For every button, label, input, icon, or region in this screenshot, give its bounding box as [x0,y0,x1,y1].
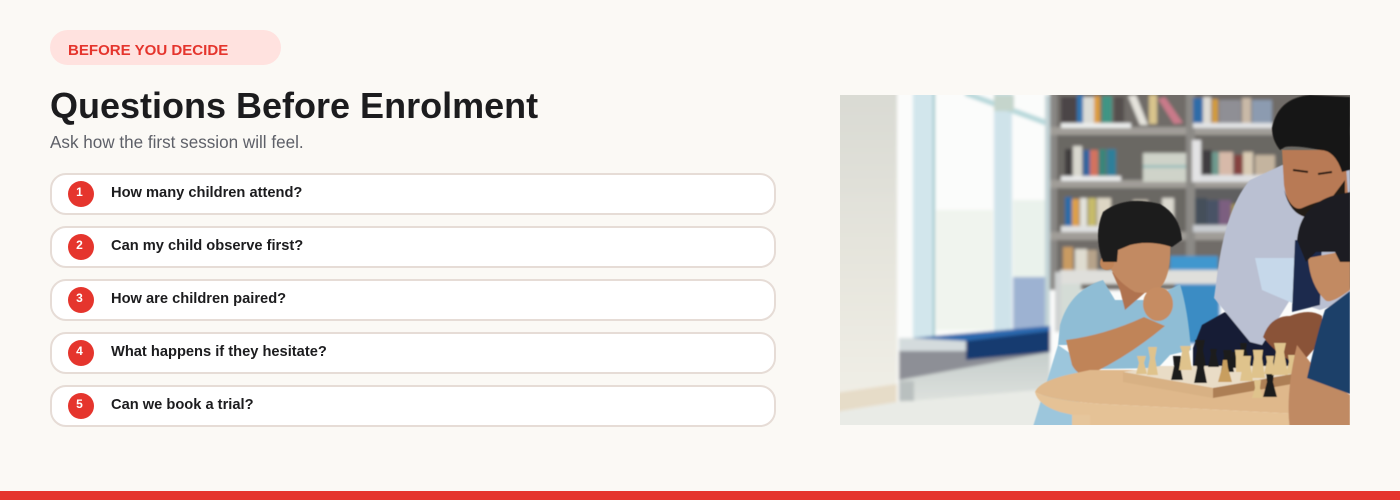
question 4 [50,332,776,374]
bench behind child [1170,256,1218,270]
light pieces [1136,343,1298,398]
number 5 [68,393,94,419]
question 2 [50,226,776,268]
number 3: 3 [76,291,83,305]
man shirt [1214,160,1350,345]
footer bar [0,491,1400,500]
books shelf 2 [1065,149,1072,177]
black pieces [1171,340,1277,397]
number 2: 2 [76,238,83,252]
question 3 text: How are children paired? [111,290,286,306]
boy two [1289,192,1350,430]
number 5: 5 [76,397,83,411]
number 1 [68,181,94,207]
badge label: BEFORE YOU DECIDE [68,42,228,58]
man trousers [1193,312,1310,375]
books shelf 1 [1061,97,1077,123]
question 5 text: Can we book a trial? [111,396,254,412]
number 4 [68,340,94,366]
people, table and chess [1032,95,1350,430]
question 5 [50,385,776,427]
boy shirt lower [1032,345,1080,430]
badge: before you decide [50,30,281,65]
subtitle: Ask how the first session will feel. [50,133,304,152]
boy one [1058,201,1191,375]
title: Questions Before Enrolment [50,85,538,126]
question 1 text: How many children attend? [111,184,302,200]
question 1 [50,173,776,215]
number 1: 1 [76,185,83,199]
background room [835,90,1355,430]
tie [1292,240,1322,312]
books shelf 3 [1065,197,1072,227]
chess board [1123,340,1304,398]
photo: boys playing chess with an adult in a library [840,95,1350,425]
question 4 text: What happens if they hesitate? [111,344,327,360]
number 4: 4 [76,344,83,358]
question 2 text: Can my child observe first? [111,238,303,254]
question 3 [50,279,776,321]
question list [50,173,776,427]
bookcase [1050,90,1355,290]
table [1035,370,1300,430]
books shelf 4 [1063,247,1073,271]
number 3 [68,287,94,313]
man head [1272,95,1350,217]
man hands [1263,312,1322,365]
number 2 [68,234,94,260]
